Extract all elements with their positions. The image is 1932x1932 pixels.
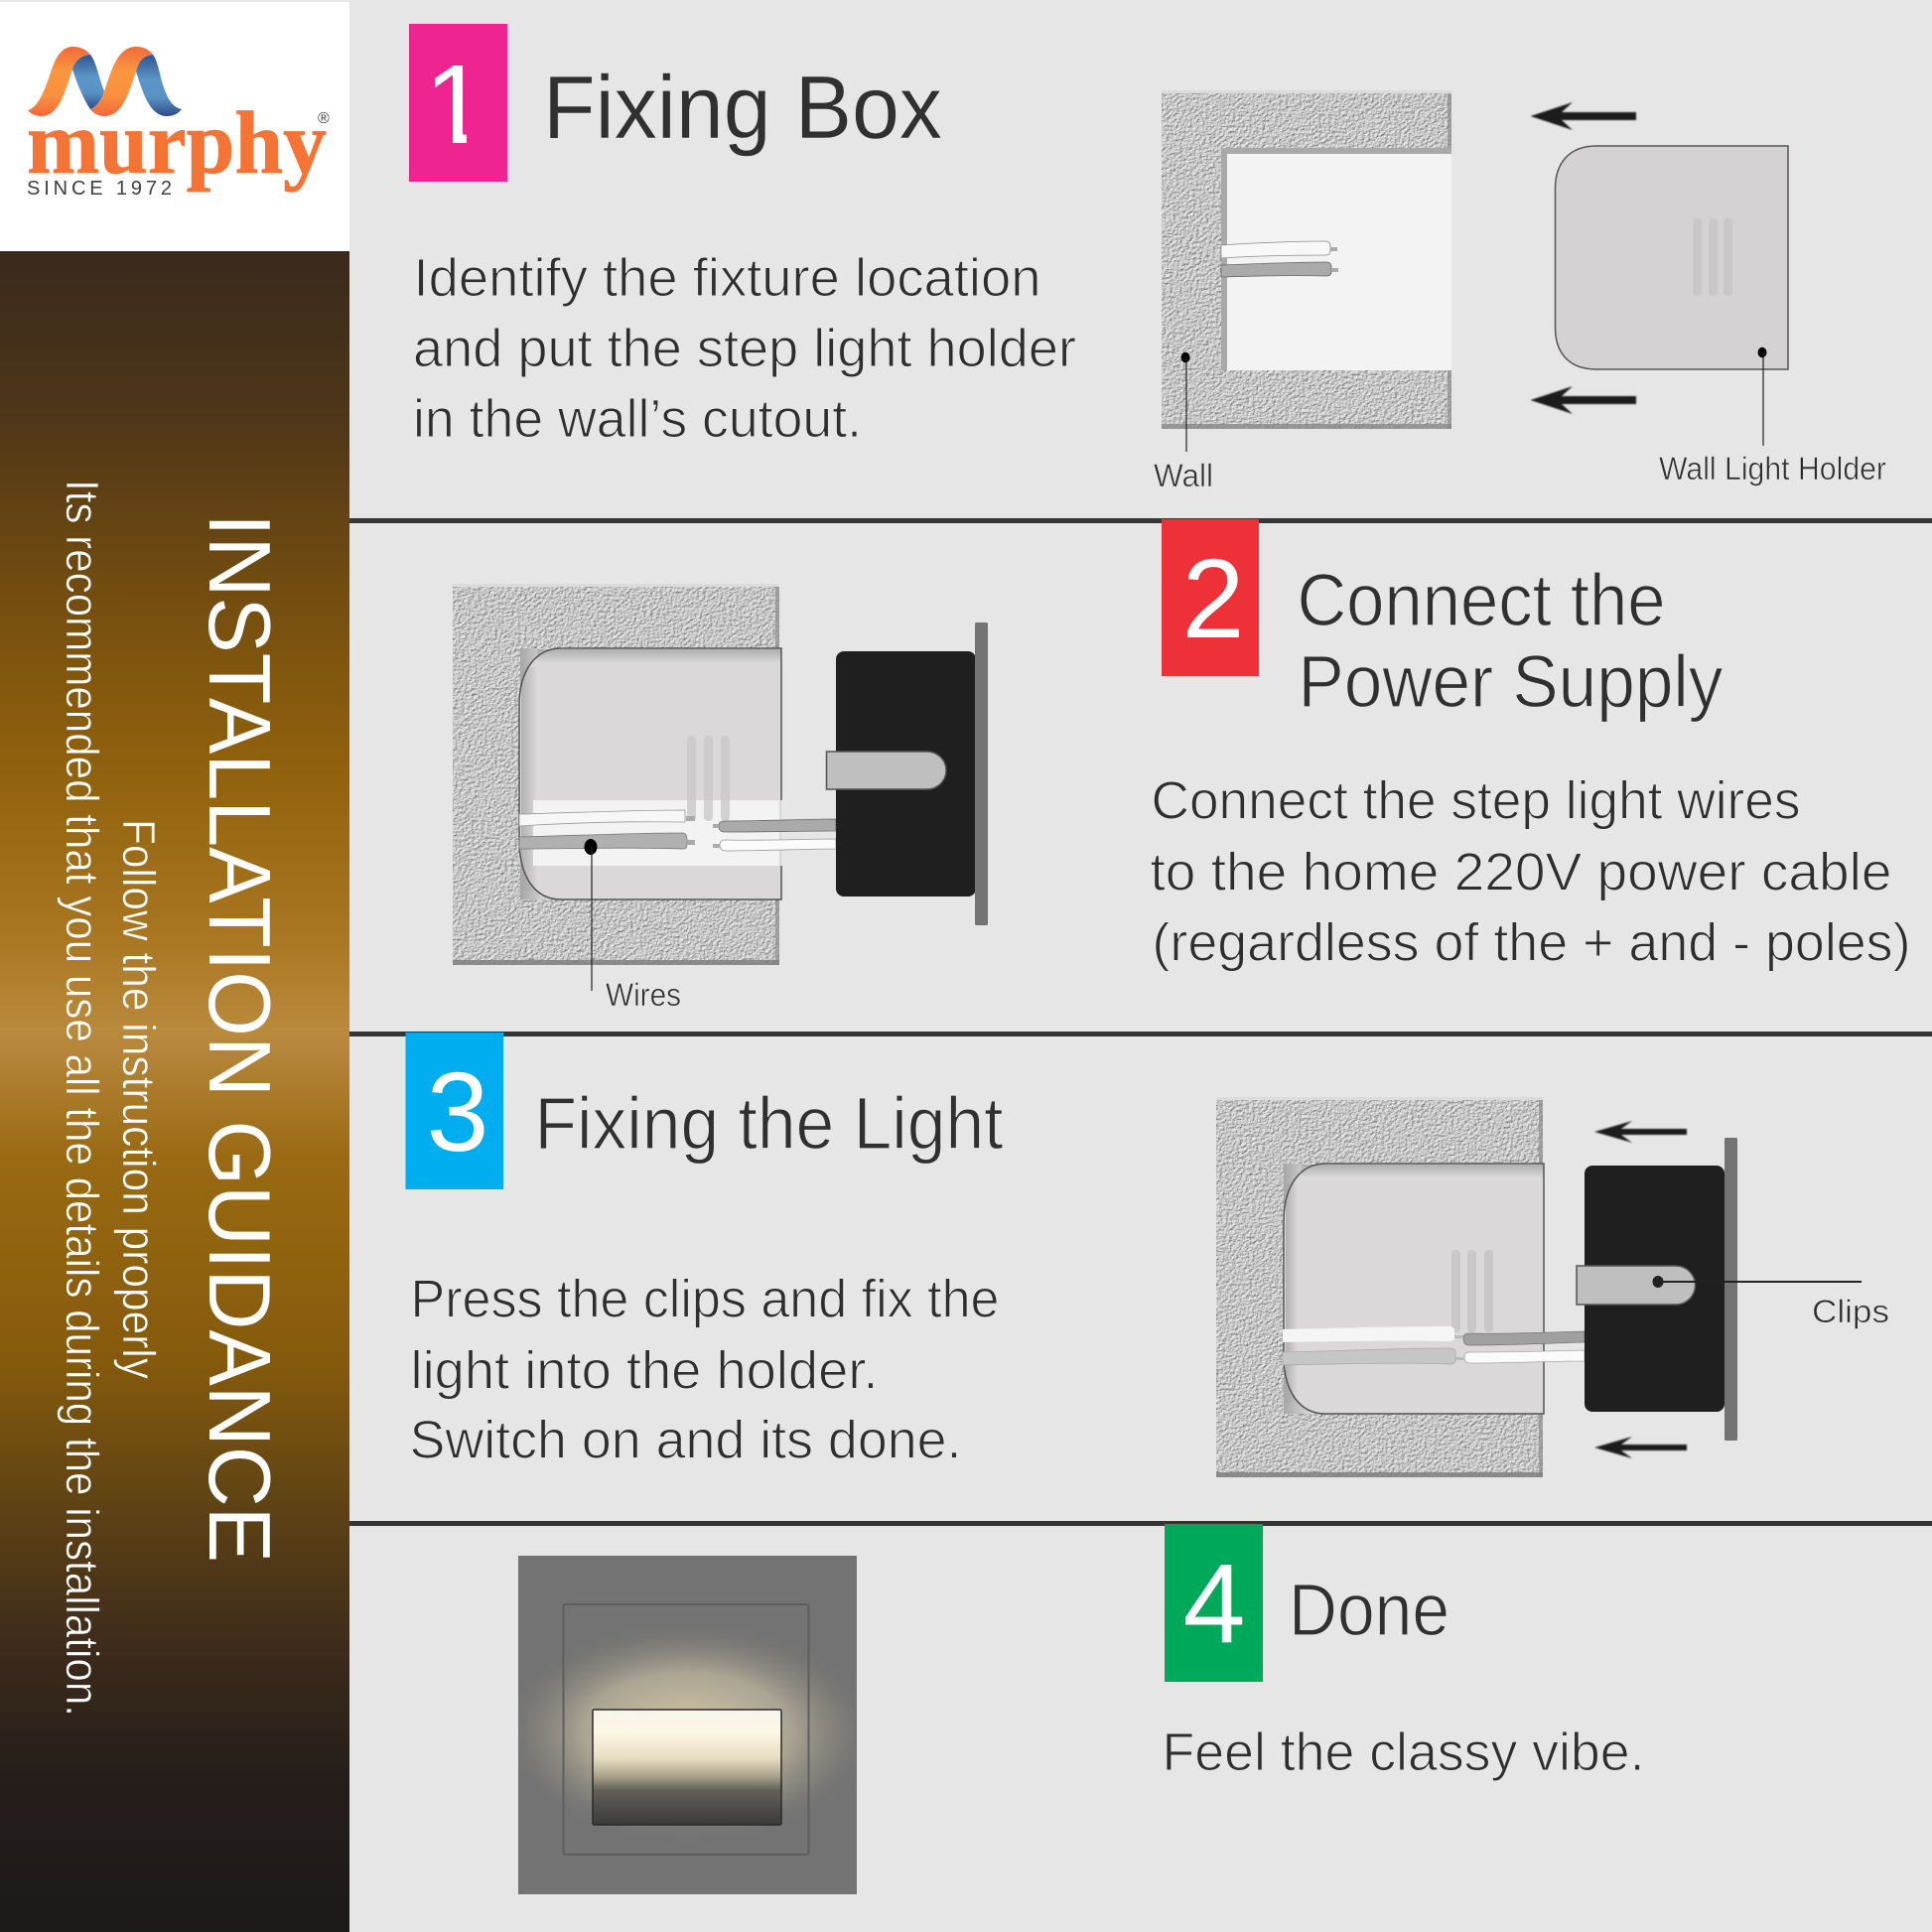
step 2 heading xyxy=(1297,559,1724,723)
step 1 heading: Fixing Box xyxy=(543,59,942,158)
step 4 badge xyxy=(1165,1524,1263,1682)
panel: step 1 fixing box xyxy=(409,24,1886,493)
step 3 body text: light into the holder. xyxy=(411,1340,878,1400)
step 4 body text: Feel the classy vibe. xyxy=(1162,1723,1644,1782)
wires xyxy=(1283,1326,1585,1365)
divider 3 xyxy=(349,1521,1932,1526)
step 1 body text xyxy=(413,248,1076,449)
logo panel xyxy=(0,2,349,251)
logo tagline: SINCE 1972 xyxy=(27,178,172,200)
step 1 badge xyxy=(409,24,507,182)
registered mark: ® xyxy=(318,110,330,127)
step 2 heading: Power Supply xyxy=(1299,640,1724,723)
spring clip xyxy=(826,752,946,789)
step 1 body text: Identify the fixture location xyxy=(413,248,1040,308)
textured wall xyxy=(1216,1097,1543,1477)
wall light holder installed xyxy=(519,648,781,899)
arrow: bottom press direction xyxy=(1594,1437,1687,1458)
step 2 body text xyxy=(1150,770,1910,973)
step 3 body text: Switch on and its done. xyxy=(409,1410,961,1469)
step 3 badge: 3 xyxy=(427,1049,488,1174)
panel: step 3 fixing the light xyxy=(405,1033,1889,1477)
step 2 body text: (regardless of the + and - poles) xyxy=(1152,913,1910,973)
step 2 badge xyxy=(1162,519,1259,676)
step 4 heading: Done xyxy=(1289,1569,1449,1651)
cut wires xyxy=(1221,241,1338,277)
diagram: light pressed into holder xyxy=(1216,1097,1737,1477)
wires xyxy=(519,810,836,851)
step 3 heading: Fixing the Light xyxy=(534,1082,1004,1165)
divider 2 xyxy=(349,1032,1932,1036)
step 1 body text: and put the step light holder xyxy=(413,319,1076,378)
step 2 badge: 2 xyxy=(1182,536,1244,661)
diagram: wall with cutout xyxy=(1162,90,1451,429)
divider 1 xyxy=(349,518,1932,523)
callout: clips: Clips xyxy=(1812,1294,1889,1329)
sidebar note: use all details: Its recommended that you use all the details during the installation. xyxy=(57,480,108,1717)
callout: wires: Wires xyxy=(606,977,681,1013)
step 1 badge: 1 xyxy=(425,42,486,167)
step 3 body text: Press the clips and fix the xyxy=(411,1269,999,1328)
arrow: bottom insert direction xyxy=(1531,386,1636,414)
textured wall xyxy=(453,584,779,965)
callout: wall xyxy=(1154,352,1213,493)
step 2 heading: Connect the xyxy=(1297,559,1666,641)
callout: clips xyxy=(1652,1276,1889,1329)
sidebar panel xyxy=(0,251,349,1932)
step 2 body text: to the home 220V power cable xyxy=(1150,842,1892,901)
step 1 body text: in the wall’s cutout. xyxy=(413,389,862,449)
diagram: wall light holder xyxy=(1555,146,1788,369)
step 3 badge xyxy=(405,1033,503,1189)
sidebar heading: INSTALLATION GUIDANCE xyxy=(191,513,289,1563)
arrow: top insert direction xyxy=(1531,102,1636,130)
callout: wall light holder: Wall Light Holder xyxy=(1659,451,1886,486)
panel: step 2 connect the power supply xyxy=(453,519,1910,1013)
wall light holder installed xyxy=(1284,1164,1544,1414)
spring clip xyxy=(1577,1266,1696,1305)
callout: wall light holder xyxy=(1659,347,1886,486)
arrow: top press direction xyxy=(1594,1121,1687,1143)
step light body xyxy=(1585,1138,1737,1441)
step 3 body text xyxy=(409,1269,999,1469)
step 4 badge: 4 xyxy=(1183,1541,1245,1666)
callout: wires xyxy=(584,839,681,1013)
step light body xyxy=(836,622,988,925)
sidebar note: follow instruction: Follow the instruction properly xyxy=(113,819,165,1379)
icon: murphy ribbon m xyxy=(28,47,182,116)
logo wordmark: murphy xyxy=(27,94,327,193)
diagram: wall, holder and light with wires xyxy=(453,584,988,965)
panel: step 4 done xyxy=(518,1524,1644,1894)
step 2 body text: Connect the step light wires xyxy=(1152,770,1801,830)
finished step light xyxy=(518,1556,857,1894)
callout: wall: Wall xyxy=(1154,458,1213,493)
